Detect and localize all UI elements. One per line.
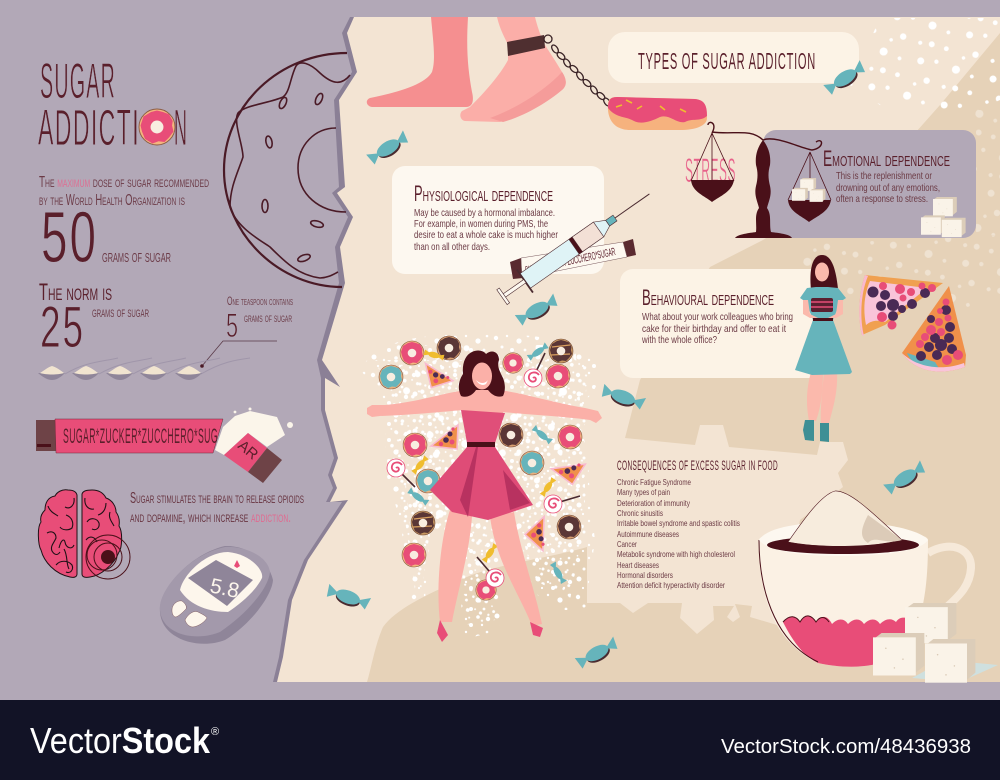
sugar sachet: SUGAR*ZUCKER*ZUCCHERO*SUG (63, 425, 218, 448)
norm 25 grams figure (39, 279, 149, 360)
card: emotional dependence (763, 130, 976, 238)
consequences list: Chronic sinusitis (617, 508, 663, 518)
legs (438, 510, 542, 626)
norm 25 grams figure: 25 (40, 295, 85, 360)
brain text: Sugar stimulates the brain to release opioids (130, 490, 304, 507)
card: physiological dependence: For example, in women during PMS, the (414, 218, 548, 230)
coffee (767, 536, 919, 554)
card: types of sugar addiction: TYPES OF SUGAR ADDICTION (638, 48, 816, 74)
sugar sachet (36, 408, 293, 483)
text: N (174, 99, 188, 156)
sugar sachet: AR (234, 437, 261, 464)
consequences list: Cancer (617, 539, 637, 549)
consequences list (617, 457, 778, 590)
coffee cup with sugar (759, 491, 971, 667)
icon: title donut (139, 109, 175, 145)
card: behavioural dependence: What about your work colleagues who bring (642, 311, 793, 323)
50 grams figure: 50 (41, 198, 98, 278)
sweets around woman (379, 336, 585, 600)
consequences list: Metabolic syndrome with high cholesterol (617, 549, 735, 559)
woman holding cake (795, 255, 852, 442)
recommended dose text: by the World Health Organization is (39, 192, 185, 209)
consequences list: Heart diseases (617, 560, 659, 570)
icon: sugar cubes (921, 197, 966, 237)
big donut outline (224, 53, 350, 287)
card: behavioural dependence (620, 269, 825, 378)
card: behavioural dependence: cake for their birthday and offer to eat it (642, 323, 786, 335)
watermark logo: ® (211, 726, 219, 738)
footer bar (0, 700, 1000, 780)
card: types of sugar addiction (608, 32, 859, 83)
cup handle (928, 547, 971, 606)
card: physiological dependence: May be caused by a hormonal imbalance. (414, 207, 555, 219)
brain text: and dopamine, which increase addiction. (130, 509, 291, 526)
cup outline (759, 540, 829, 662)
dress (461, 410, 505, 443)
hair (459, 351, 505, 397)
chain (544, 35, 612, 107)
woman lying in sugar (367, 351, 602, 642)
recommended dose text (39, 174, 209, 209)
consequences list: Attention deficit hyperactivity disorder (617, 580, 725, 590)
consequences list: Autoimmune diseases (617, 529, 679, 539)
text: CONSEQUENCES OF EXCESS SUGAR IN FOOD (617, 457, 778, 473)
consequences list: Many types of pain (617, 487, 670, 497)
card: emotional dependence: often a response to stress. (836, 193, 928, 205)
title (38, 53, 188, 156)
watermark logo: VectorStock (30, 720, 211, 761)
balance scale (691, 122, 831, 238)
teaspoons row (38, 358, 250, 380)
chained donut (608, 97, 707, 130)
card: physiological dependence: than on all other days. (414, 241, 490, 253)
teal candies (324, 60, 928, 671)
consequences list: Irritable bowel syndrome and spastic colitis (617, 518, 740, 528)
50 grams figure: grams of sugar (102, 246, 171, 266)
feet in shackle (367, 17, 612, 122)
icon: glucose meter (160, 546, 273, 644)
card: physiological dependence (392, 166, 604, 274)
sachet under syringe: SUGAR*ZUCKER*ZUCCHERO*SUGAR (524, 246, 617, 277)
consequences list: Chronic Fatigue Syndrome (617, 477, 691, 487)
card: physiological dependence: desire to eat a whole cake is much higher (414, 229, 558, 241)
sachet under syringe (510, 239, 636, 279)
cup rim (759, 522, 928, 556)
consequences list: Deterioration of immunity (617, 498, 691, 508)
teaspoon note: 5 (226, 307, 240, 345)
tan background shape (367, 33, 1000, 682)
watermark url: VectorStock.com/48436938 (721, 736, 971, 758)
card: physiological dependence: Physiological dependence (414, 181, 553, 206)
norm 25 grams figure: grams of sugar (92, 304, 149, 321)
title: ADDICTI (38, 99, 140, 156)
teaspoon note (200, 294, 293, 368)
icon: glucose meter: 5.8 (208, 574, 241, 603)
card: emotional dependence: drowning out of any emotions, (836, 182, 940, 194)
ankle cuff (507, 35, 545, 56)
sugar dots top right (850, 18, 1000, 118)
teaspoon note: grams of sugar (244, 310, 292, 325)
right foot (460, 17, 566, 122)
brain text (130, 490, 304, 526)
sugar scatter around woman (362, 335, 598, 640)
faint sugar dots right (790, 110, 1000, 310)
arms and torso (367, 390, 602, 423)
cream paper (277, 17, 1000, 682)
title: SUGAR (40, 53, 116, 109)
shoes (437, 620, 543, 642)
left foot (367, 17, 473, 107)
card: behavioural dependence: with the whole office? (641, 334, 717, 346)
norm 25 grams figure: The norm is (39, 279, 112, 306)
50 grams figure (41, 198, 171, 278)
text: STRESS (685, 152, 736, 190)
teaspoon note: One teaspoon contains (227, 294, 293, 308)
consequences list: Hormonal disorders (617, 570, 673, 580)
recommended dose text: The maximum dose of sugar recommended (39, 174, 209, 191)
icon: brain (38, 490, 130, 579)
cup body (759, 529, 928, 667)
card: emotional dependence: This is the replenishment or (836, 170, 932, 182)
sugar mound (788, 491, 902, 546)
pie slices (859, 275, 966, 372)
card: behavioural dependence: Behavioural dependence (642, 285, 774, 310)
syringe (494, 182, 657, 309)
sugar cubes by cup (873, 603, 998, 683)
torn paper shadow (273, 17, 500, 682)
cup pink base (783, 616, 910, 667)
